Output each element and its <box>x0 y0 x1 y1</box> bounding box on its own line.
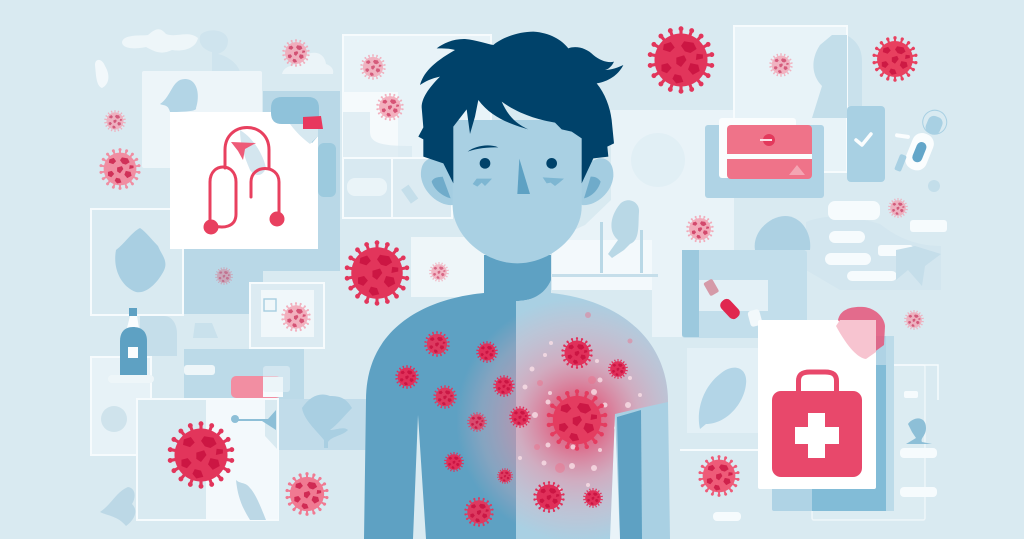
right ear <box>578 158 613 205</box>
outlined panel left <box>91 209 183 315</box>
light panel below left of head <box>411 237 486 297</box>
virus chest 4 <box>433 385 457 409</box>
virus chest 8 <box>464 497 494 527</box>
pale virus right <box>686 215 714 243</box>
stethoscope red mark <box>231 142 256 160</box>
lower right cell <box>392 158 452 218</box>
kit handle <box>798 372 836 391</box>
light panel behind head right <box>552 110 734 337</box>
virus chest 5 <box>467 412 487 432</box>
card stripe emblem <box>760 139 772 141</box>
virus chest 3 <box>395 365 419 389</box>
rounded panel inner <box>343 112 412 158</box>
blue panel <box>263 91 340 271</box>
pale fold under block <box>290 124 318 144</box>
red blob corner <box>838 307 885 358</box>
head, drawn in zoom coordinates <box>418 32 623 263</box>
silhouette top right <box>812 35 847 118</box>
ghost virus <box>631 133 685 187</box>
bulb <box>924 114 944 136</box>
white pills <box>828 201 880 220</box>
small outlined panel <box>250 283 324 348</box>
outline panel front <box>894 365 938 400</box>
icon: bottle <box>108 308 154 383</box>
virus chest 1 <box>424 331 450 357</box>
lower left cell <box>343 158 392 218</box>
inner light panel <box>261 290 314 337</box>
kit body <box>772 391 862 477</box>
left inner ear <box>432 177 451 198</box>
silhouette behind panel <box>200 30 240 72</box>
light band in panel <box>343 92 398 158</box>
pink tag <box>231 376 281 398</box>
cloud shape <box>122 29 198 53</box>
right inner ear <box>584 177 601 198</box>
panel: stethoscope card <box>170 97 323 249</box>
virus chest 9 <box>493 375 515 397</box>
virus chest 14 <box>533 481 565 513</box>
infection glow <box>462 309 668 530</box>
virus top right <box>872 36 918 82</box>
pale virus panel lower <box>376 93 404 121</box>
pale blotches <box>534 312 632 473</box>
pills right low <box>900 448 937 458</box>
bar panel <box>347 178 387 196</box>
light panel <box>142 71 262 168</box>
red card <box>727 125 812 179</box>
panel: first aid card <box>758 307 885 489</box>
check card <box>847 106 885 182</box>
virus chest 12 <box>608 359 628 379</box>
background panels: centre outlined collage <box>343 35 491 297</box>
white paper <box>719 118 796 178</box>
kit cross <box>795 413 839 458</box>
outline lower right <box>812 365 925 520</box>
check mark <box>856 134 871 145</box>
blue panel behind bag <box>772 336 894 511</box>
background panels: left cluster <box>91 29 366 526</box>
tiny frame icon <box>264 299 276 311</box>
spiky plant <box>896 246 941 286</box>
pink sticker <box>836 320 876 359</box>
virus bottom right <box>698 455 740 497</box>
dark block right <box>318 143 336 197</box>
left under-eye <box>473 179 492 187</box>
ghost shape on card <box>240 130 266 175</box>
lab base <box>552 274 658 277</box>
bottom right blue panel <box>265 399 366 450</box>
plant silhouette <box>302 394 352 448</box>
bottle base <box>108 375 154 383</box>
background panels: right cluster <box>552 26 950 521</box>
vial <box>703 278 719 296</box>
feather panel <box>687 348 759 433</box>
virus left of chest <box>344 240 410 306</box>
bottle body <box>120 327 147 375</box>
arm gap <box>610 414 620 539</box>
lab figure silhouette <box>600 200 643 273</box>
pill white <box>184 365 215 375</box>
right arm dark panel <box>617 410 642 539</box>
left eye <box>480 158 490 169</box>
outline left lower <box>91 357 151 455</box>
arrow shape <box>232 410 276 430</box>
virus chest 11 <box>561 337 593 369</box>
virus chest 10 <box>509 406 531 428</box>
virus bottom centre left <box>285 472 329 516</box>
ghost small virus <box>928 180 940 192</box>
reading window <box>911 141 928 164</box>
body dark left half <box>364 255 551 539</box>
feather <box>699 368 746 429</box>
pale virus small panel <box>281 302 311 332</box>
dark rounded block over card corner <box>271 97 319 143</box>
thermometer icon <box>894 104 950 181</box>
virus chest 6 <box>444 452 464 472</box>
small figure <box>906 418 932 444</box>
icon: stethoscope <box>204 128 284 234</box>
white speckles <box>518 341 642 492</box>
lower blue panel <box>184 249 263 314</box>
bottle neck <box>127 316 139 328</box>
figure: person <box>364 32 680 539</box>
white tag <box>263 377 283 397</box>
top outlined panel <box>343 35 491 158</box>
face <box>453 120 582 263</box>
dim virus <box>215 267 233 285</box>
viruses in the background <box>99 26 924 516</box>
figure left bottom <box>100 487 135 526</box>
white blob <box>95 60 108 88</box>
card stripe <box>727 154 812 159</box>
ghost virus left <box>101 406 127 432</box>
bottle label <box>128 347 138 358</box>
rounded panel behind bottle <box>140 316 177 356</box>
thermometer tail <box>894 154 907 172</box>
outline big bottom left <box>137 399 278 520</box>
darker blue panel <box>812 365 886 511</box>
right eye <box>546 158 557 169</box>
virus chest main <box>546 389 608 451</box>
light edge <box>886 336 894 511</box>
rough silhouette <box>115 228 165 292</box>
top right outlined panel <box>734 26 847 172</box>
small grey-blue pin <box>231 415 239 423</box>
white dash <box>895 133 910 139</box>
red tag on card <box>303 116 323 129</box>
icon: first aid kit <box>772 372 862 477</box>
pale virus lower right <box>904 310 924 330</box>
white chip <box>747 309 763 327</box>
virus bottom left large <box>167 421 235 489</box>
body light right half <box>516 280 670 539</box>
crown silhouette <box>755 216 810 250</box>
virus chest 2 <box>476 341 498 363</box>
chest viruses <box>395 331 628 527</box>
pale virus panel <box>360 54 386 80</box>
blue panel behind red card <box>705 125 824 198</box>
small cloud <box>282 53 333 74</box>
blue panel mid right <box>682 250 807 338</box>
pale virus upper right <box>769 53 793 77</box>
red pill <box>718 297 742 321</box>
rounded white panel <box>263 366 290 392</box>
hair <box>418 32 623 183</box>
left ear <box>421 158 457 205</box>
left brow <box>468 145 498 152</box>
nose <box>517 159 530 194</box>
pale virus <box>104 110 126 132</box>
figure bottom center <box>236 480 266 520</box>
infographic canvas <box>90 25 948 539</box>
strip <box>401 185 418 204</box>
virus chest 15 <box>583 488 603 508</box>
divider under feather panel <box>680 449 760 451</box>
pale virus neck side <box>429 262 449 282</box>
card emblem <box>763 134 775 146</box>
right pill cluster backdrop <box>806 217 941 290</box>
lower band panel <box>184 349 304 399</box>
pale virus far right <box>888 198 908 218</box>
dark strip <box>682 250 699 337</box>
panel gradient light <box>552 240 652 290</box>
white half <box>206 400 278 519</box>
mini pill block <box>193 323 218 338</box>
virus left <box>99 148 141 190</box>
virus large top centre <box>647 26 715 94</box>
silhouette strip outside panel <box>848 36 862 106</box>
pale virus top <box>282 39 310 67</box>
virus chest 7 <box>497 468 513 484</box>
right under-eye <box>543 177 564 186</box>
silhouette in light panel <box>160 79 198 112</box>
card triangle <box>789 165 805 175</box>
thermometer body <box>902 130 937 173</box>
light inner <box>699 280 768 311</box>
